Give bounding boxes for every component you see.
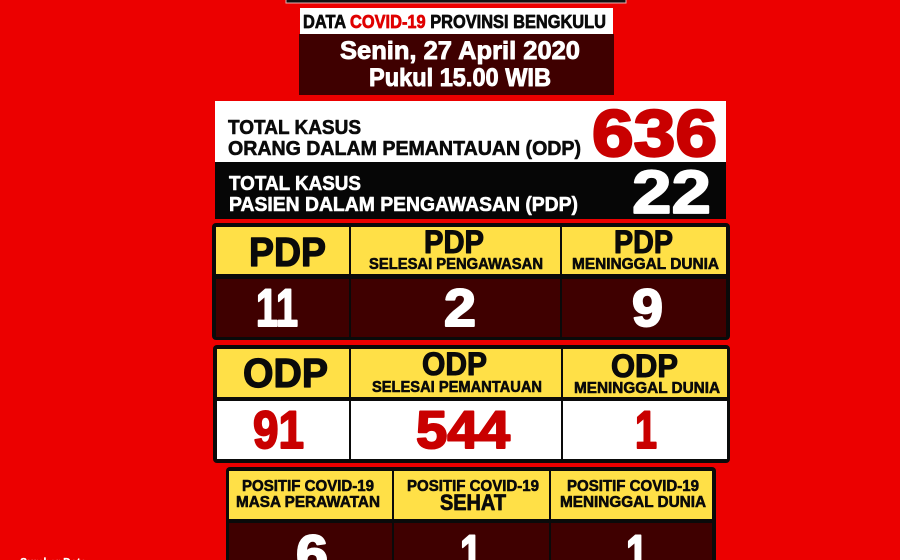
PDP header cells: MENINGGAL DUNIA [572, 256, 719, 273]
ODP value cells: 91 [253, 401, 304, 460]
panel: total PDP: TOTAL KASUS [229, 173, 361, 195]
PDP header cells: PDP [614, 224, 673, 260]
positive header cells: SEHAT [440, 490, 507, 515]
total ODP value: 636 [592, 96, 717, 170]
total PDP value: 22 [632, 158, 711, 226]
positive header cells: POSITIF COVID-19 [242, 478, 374, 495]
header: date and time [299, 34, 614, 95]
ODP value cells [217, 401, 727, 460]
ODP header cells: SELESAI PEMANTAUAN [372, 379, 542, 396]
header: date and time: Pukul 15.00 WIB [369, 64, 551, 92]
PDP value cells: 1 [256, 279, 278, 338]
PDP header cells: PDP [249, 229, 326, 275]
ODP header cells: ODP [243, 350, 328, 396]
table: PDP [212, 223, 730, 340]
PDP header cells: PDP [424, 224, 484, 260]
header: data title: DATA COVID-19 PROVINSI BENGKULU [303, 12, 606, 32]
panel: total ODP [215, 96, 726, 170]
ODP header cells: ODP [611, 348, 678, 384]
ODP header cells: MENINGGAL DUNIA [574, 380, 720, 397]
panel: total ODP: ORANG DALAM PEMANTAUAN (ODP) [228, 138, 581, 160]
PDP value cells: 9 [632, 279, 663, 338]
PDP header cells: SELESAI PENGAWASAN [369, 256, 543, 273]
ODP value cells: 544 [416, 401, 511, 460]
panel: total PDP: PASIEN DALAM PENGAWASAN (PDP) [229, 194, 578, 216]
table: ODP [213, 345, 730, 463]
top bar [286, 0, 626, 3]
panel: total PDP [215, 158, 726, 226]
positive header cells: MENINGGAL DUNIA [560, 494, 706, 511]
positive header cells: MASA PERAWATAN [236, 494, 380, 511]
PDP value cells [216, 279, 726, 338]
table: positive COVID-19 [226, 467, 716, 560]
header: date and time: Senin, 27 April 2020 [340, 37, 580, 65]
panel: total ODP: TOTAL KASUS [228, 117, 361, 139]
positive value cells [229, 523, 712, 560]
ODP header cells: ODP [422, 346, 487, 382]
positive header cells [229, 471, 712, 519]
positive header cells: POSITIF COVID-19 [407, 478, 539, 495]
ODP header cells [217, 346, 727, 397]
PDP value cells: 2 [444, 279, 476, 338]
positive header cells: POSITIF COVID-19 [567, 478, 699, 495]
ODP value cells: 1 [635, 401, 657, 460]
PDP value cells: 1 [276, 279, 298, 338]
PDP header cells [216, 224, 726, 275]
